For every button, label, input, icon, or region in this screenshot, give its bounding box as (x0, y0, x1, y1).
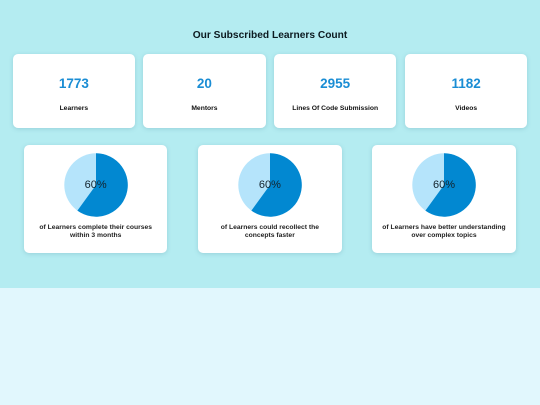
stat card: learners: 1773 (59, 76, 89, 91)
caption: of Learners complete their courses (39, 224, 152, 231)
percentage label: 60% (259, 179, 281, 191)
caption (221, 224, 319, 239)
caption: over complex topics (411, 232, 477, 239)
title: Our Subscribed Learners Count (193, 30, 347, 41)
pie chart: 60 percent (412, 153, 476, 217)
caption (39, 224, 152, 239)
stat card: lines of code: 2955 (320, 76, 350, 91)
stat card: lines of code (274, 54, 396, 128)
stat card: mentors: 20 (197, 76, 212, 91)
pie card: complete courses (24, 145, 167, 253)
percentage label: 60% (85, 179, 107, 191)
caption: of Learners could recollect the (221, 224, 319, 231)
pie card: better understanding (372, 145, 516, 253)
percentage label: 60% (433, 179, 455, 191)
caption: concepts faster (245, 232, 295, 239)
pie chart: 60 percent (238, 153, 302, 217)
pie chart: 60 percent (64, 153, 128, 217)
stat card: videos: Videos (455, 105, 477, 112)
stat card: learners: Learners (60, 105, 88, 112)
caption (382, 224, 506, 239)
background band (0, 0, 540, 288)
stat card: mentors (143, 54, 266, 128)
stat card: videos: 1182 (452, 76, 481, 91)
stat card: mentors: Mentors (191, 105, 218, 112)
pie card: recollect concepts (198, 145, 342, 253)
caption: of Learners have better understanding (382, 224, 506, 231)
stat card: learners (13, 54, 135, 128)
stat card: videos (405, 54, 527, 128)
stat card: lines of code: Lines Of Code Submission (292, 105, 378, 112)
caption: within 3 months (70, 232, 121, 239)
